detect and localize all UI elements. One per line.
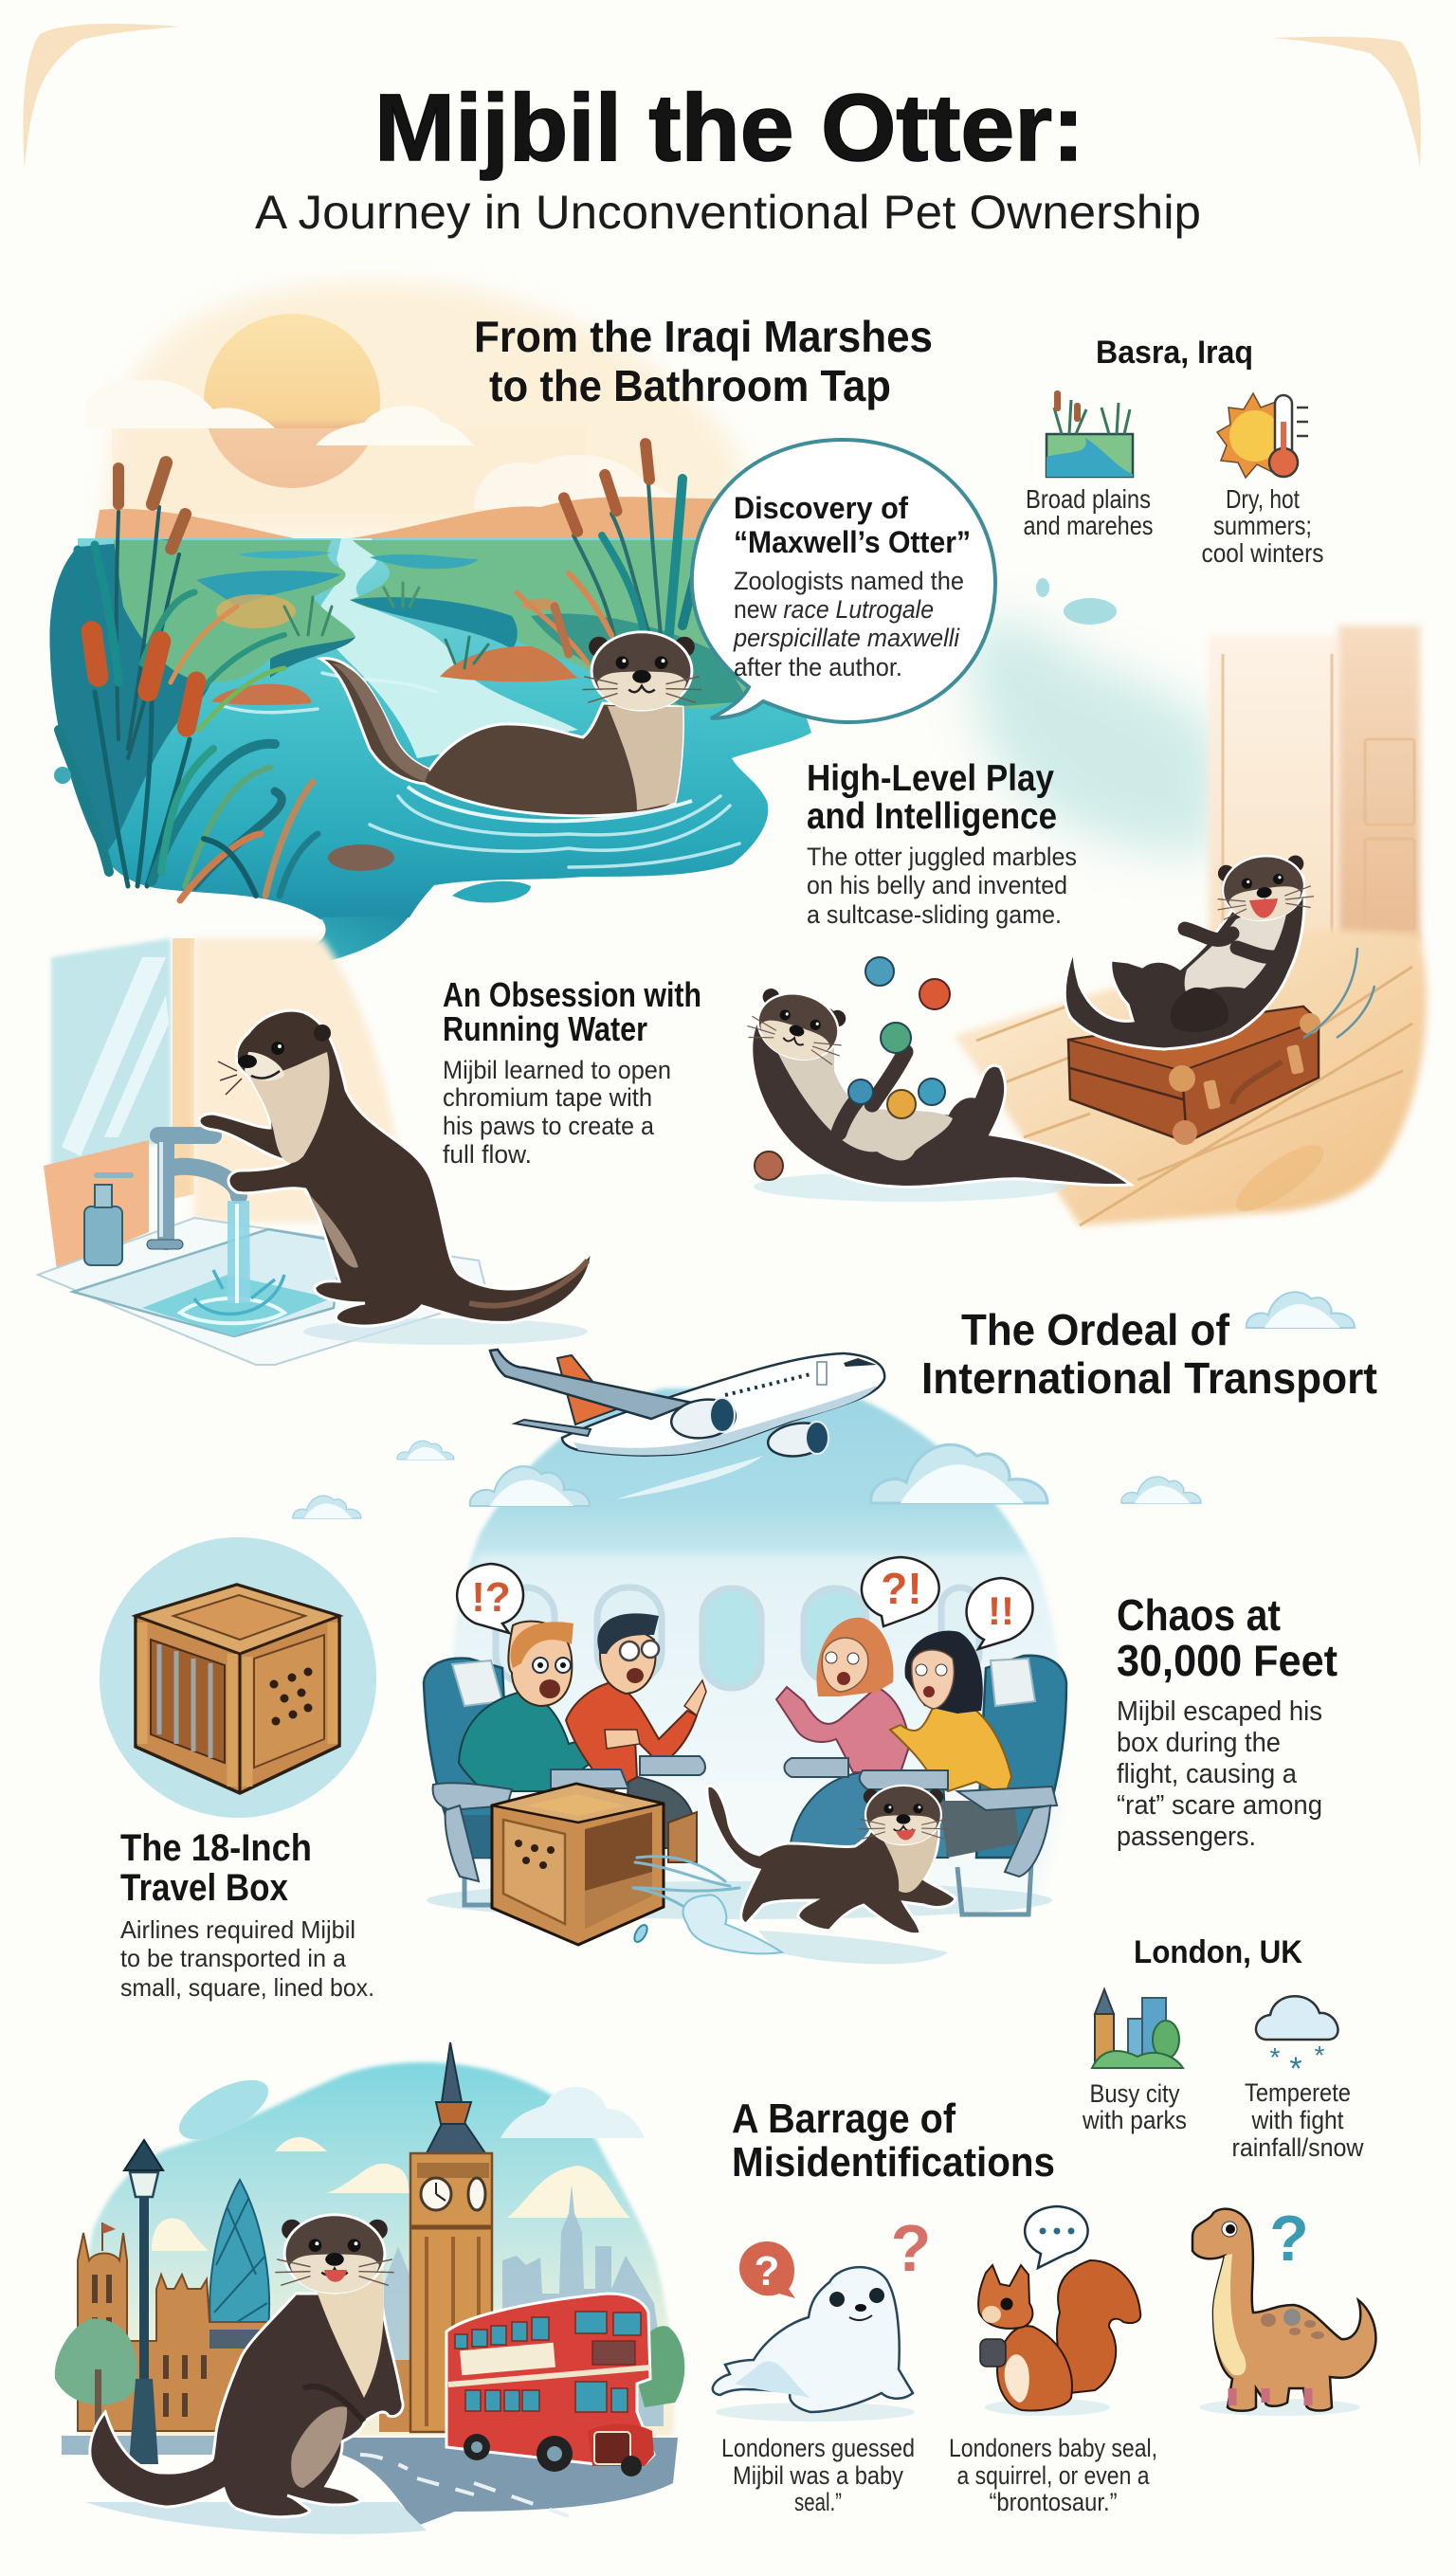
right bank [350, 540, 758, 709]
icon: cloud with snow: * [1289, 2051, 1302, 2087]
question bubble red [739, 2241, 795, 2298]
text: the 18-inch travel box: to be transported in a [120, 1944, 347, 1972]
islands and rock [211, 684, 311, 705]
caption: temperate: rainfall/snow [1232, 2133, 1364, 2162]
text: obsession with running water: his paws to create a [443, 1112, 655, 1140]
callout: Discovery of Maxwell's Otter [692, 440, 995, 722]
caption: Londoners baby seal: a squirrel, or even a [957, 2461, 1150, 2490]
floor shadows [427, 1881, 1052, 1964]
ripples [223, 673, 739, 867]
corner decoration: top left [23, 24, 180, 169]
speech bubble with dots [1025, 2206, 1088, 2268]
heading: a barrage of misidentifications: Misidentifications [732, 2139, 1055, 2186]
callout: Discovery of Maxwell's Otter: Zoologists named the [734, 567, 964, 595]
passenger: man in teal [459, 1622, 605, 1791]
Big Ben [410, 2042, 492, 2432]
caption: dry hot summers: summers; [1213, 511, 1312, 540]
heading: the ordeal of international transport [921, 1305, 1377, 1403]
icon: cloud with snow: * [1315, 2041, 1325, 2070]
basin [73, 1229, 341, 1336]
text: the 18-inch travel box: Travel Box [120, 1867, 288, 1909]
caption: busy city [1082, 2079, 1187, 2134]
text: high-level play: and Intelligence [807, 796, 1057, 837]
otter juggling marbles [742, 957, 1131, 1202]
caption: dry hot summers: Dry, hot [1226, 484, 1300, 514]
heading: London, UK: London, UK [1134, 1934, 1302, 1970]
corner decoration: top right [1273, 37, 1421, 169]
otter on suitcase [1065, 850, 1374, 1049]
illustration: bathroom background [38, 938, 488, 1365]
icon: cloud with snow [1256, 1996, 1338, 2087]
passenger: woman in yellow [890, 1631, 1011, 1796]
text: the 18-inch travel box: small, square, lined box. [120, 1973, 374, 2002]
icon: sun and thermometer [1217, 393, 1308, 478]
caption: dry hot summers: cool winters [1202, 538, 1323, 568]
icon: soap bottle [84, 1175, 131, 1265]
squirrel [978, 2260, 1140, 2416]
question mark blue: ? [1269, 2203, 1309, 2275]
speech bubble: !?: !? [471, 1574, 511, 1621]
escape motion and dust [632, 1857, 782, 1953]
text: obsession with running water: full flow. [443, 1140, 532, 1169]
water [49, 538, 811, 919]
otter in water [320, 632, 701, 821]
caption: Londoners guessed: Londoners guessed [721, 2434, 915, 2462]
heading: From the Iraqi Marshes [474, 312, 933, 410]
question bubble red: ? [755, 2248, 779, 2295]
illustration: London scene [55, 2042, 684, 2534]
text: high-level play: High-Level Play [807, 758, 1054, 799]
caption: Londoners guessed: Mijbil was a baby [733, 2461, 903, 2490]
speech bubble: !! [967, 1578, 1033, 1649]
callout: Discovery of Maxwell's Otter: after the author. [734, 653, 902, 681]
dome clouds [470, 1444, 1047, 1506]
speech bubble: !? [457, 1564, 523, 1633]
text: high-level play: The otter juggled marbles [807, 843, 1077, 871]
caption: temperate [1232, 2078, 1364, 2162]
text: high-level play: on his belly and invented [807, 871, 1067, 899]
text: high-level play [807, 758, 1077, 929]
Gherkin [209, 2180, 269, 2329]
counter [38, 1218, 488, 1365]
travel box icon circle [100, 1537, 376, 1818]
water stream to bathroom [249, 916, 410, 1007]
heading: a barrage of misidentifications: A Barrage of [732, 2095, 956, 2142]
passenger: man in red [566, 1613, 706, 1791]
left bank [114, 540, 355, 682]
armrests [433, 1756, 1057, 1881]
caption: broad plains [1024, 484, 1153, 540]
white clouds [152, 2087, 645, 2251]
seats left [424, 1659, 694, 1905]
brontosaur [1192, 2209, 1375, 2416]
caption: Londoners guessed: seal.” [794, 2488, 842, 2516]
cabin windows [496, 1587, 979, 1688]
distant skyline [502, 2185, 664, 2426]
caption: busy city: Busy city [1090, 2079, 1180, 2108]
wooden crate [136, 1585, 339, 1793]
heading: From the Iraqi Marshes: From the Iraqi Marshes [474, 312, 933, 361]
text: chaos at 30,000 feet: box during the [1117, 1728, 1281, 1758]
heading: the ordeal of international transport: The Ordeal of [961, 1305, 1230, 1354]
subtitle: A Journey in Unconventional Pet Ownership [255, 186, 1201, 239]
illustration: room with door and floor [954, 626, 1427, 1225]
otter at the tap [199, 1010, 592, 1345]
road [62, 2436, 678, 2534]
passenger: woman in pink [776, 1618, 910, 1772]
sky [81, 2062, 674, 2436]
street lamp [124, 2140, 163, 2464]
text: chaos at 30,000 feet [1117, 1590, 1338, 1852]
speech bubble: !!: !! [988, 1588, 1014, 1633]
text: obsession with running water: Running Water [443, 1009, 647, 1048]
callout: Discovery of Maxwell's Otter: new race Lutrogale [734, 595, 934, 624]
callout: Discovery of Maxwell's Otter: perspicillate maxwelli [733, 624, 960, 652]
text: obsession with running water [443, 975, 701, 1169]
text: the 18-inch travel box: The 18-Inch [120, 1827, 312, 1869]
callout: Discovery of Maxwell's Otter: Discovery of [734, 491, 908, 525]
sky clouds [84, 380, 687, 509]
red double-decker bus [446, 2294, 654, 2476]
text: obsession with running water: Mijbil learned to open [443, 1056, 671, 1084]
text: chaos at 30,000 feet: 30,000 Feet [1117, 1636, 1338, 1685]
otter escaping [707, 1786, 956, 1934]
illustration: suitcase [1068, 1007, 1320, 1145]
heading: the ordeal of international transport: International Transport [921, 1353, 1377, 1403]
title: Mijbil the Otter: [374, 75, 1084, 181]
text: obsession with running water: An Obsession with [443, 975, 701, 1014]
reeds right [284, 479, 706, 668]
callout: Discovery of Maxwell's Otter: “Maxwell’s Otter” [734, 525, 971, 559]
illustration: Iraqi marsh scene [49, 283, 1223, 919]
open crate [492, 1784, 697, 1945]
caption: Londoners baby seal: “brontosaur.” [990, 2488, 1117, 2516]
caption: Londoners guessed [721, 2434, 915, 2516]
hills [95, 509, 294, 538]
text: chaos at 30,000 feet: “rat” scare among [1117, 1790, 1322, 1821]
otter face [218, 1025, 331, 1095]
speech bubble: ?! [862, 1557, 939, 1626]
caption: temperate: Temperete [1245, 2078, 1351, 2107]
cabin dome [451, 1388, 1063, 1782]
baby seal [713, 2267, 915, 2422]
text: the 18-inch travel box: Airlines required Mijbil [120, 1915, 355, 1944]
left bank dark reeds background [49, 538, 220, 856]
sky wash [104, 283, 739, 540]
pale river [318, 538, 578, 758]
text: the 18-inch travel box [120, 1827, 374, 2002]
text: chaos at 30,000 feet: flight, causing a [1117, 1759, 1298, 1789]
icon: city with parks [1092, 1989, 1183, 2068]
water wash to the right [966, 622, 1223, 853]
question mark red: ? [891, 2211, 931, 2285]
clouds around the plane [293, 1292, 1355, 1518]
caption: busy city: with parks [1082, 2106, 1187, 2134]
Houses of Parliament [78, 2222, 411, 2432]
icon: cloud with snow: * [1270, 2042, 1281, 2072]
seats right [790, 1656, 1066, 1914]
otter in London [90, 2215, 403, 2517]
cabin interior [424, 1554, 1066, 1964]
heading: Basra, Iraq: Basra, Iraq [1096, 335, 1253, 371]
heading: a barrage of misidentifications [732, 2095, 1055, 2186]
speech bubble: ?!: ?! [881, 1564, 922, 1613]
caption: Londoners baby seal: Londoners baby seal, [949, 2434, 1157, 2462]
caption: Londoners baby seal [949, 2434, 1157, 2516]
trees [55, 2318, 684, 2436]
caption: dry hot summers [1202, 484, 1323, 568]
text: chaos at 30,000 feet: Chaos at [1117, 1590, 1281, 1640]
caption: broad plains: and marehes [1024, 511, 1153, 540]
text: chaos at 30,000 feet: passengers. [1117, 1822, 1256, 1852]
reeds left [59, 507, 318, 900]
sun [204, 314, 380, 488]
caption: temperate: with fight [1251, 2106, 1344, 2134]
icon: faucet with running water [147, 1135, 284, 1314]
heading: From the Iraqi Marshes: to the Bathroom Tap [489, 361, 891, 410]
text: chaos at 30,000 feet: Mijbil escaped his [1117, 1696, 1322, 1727]
icon: marsh plains [1046, 390, 1133, 477]
text: high-level play: a sultcase-sliding game. [807, 900, 1062, 929]
airplane [490, 1350, 884, 1499]
caption: broad plains: Broad plains [1026, 484, 1151, 514]
text: obsession with running water: chromium tape with [443, 1083, 652, 1112]
